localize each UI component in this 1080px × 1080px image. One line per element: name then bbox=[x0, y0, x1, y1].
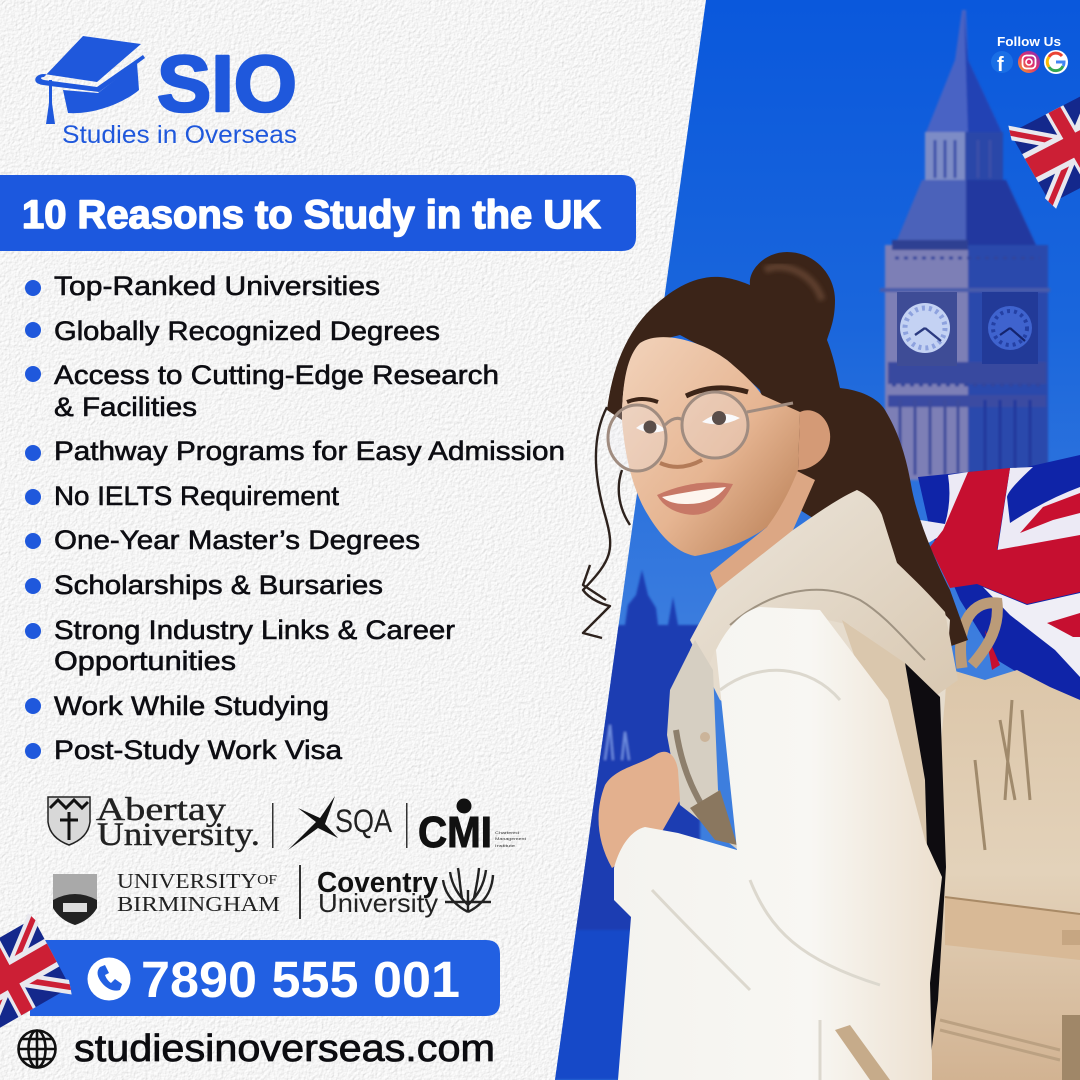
list: 10 reasons bbox=[25, 271, 565, 765]
tagline: Studies in Overseas bbox=[62, 121, 297, 149]
item 8: Opportunities bbox=[54, 646, 236, 676]
item 1: Top-Ranked Universities bbox=[54, 271, 380, 301]
clock right bbox=[982, 292, 1038, 364]
item 7: Scholarships & Bursaries bbox=[54, 570, 383, 600]
icon: google bbox=[1044, 50, 1068, 74]
logo: CMI: Chartered bbox=[495, 830, 519, 835]
item 4: Pathway Programs for Easy Admission bbox=[54, 436, 565, 466]
item 3: Access to Cutting-Edge Research bbox=[54, 360, 499, 390]
phone banner: 7890 555 001 bbox=[141, 951, 460, 1008]
icon: graduation cap bbox=[35, 36, 145, 124]
icon: globe bbox=[18, 1030, 56, 1068]
title banner bbox=[0, 175, 636, 251]
logo: SQA bbox=[288, 796, 393, 850]
eyes bbox=[636, 411, 740, 434]
item 3 bbox=[25, 360, 499, 422]
item 5: No IELTS Requirement bbox=[54, 481, 340, 511]
item 3: & Facilities bbox=[54, 392, 197, 422]
icon: instagram bbox=[1018, 51, 1040, 73]
icon: UK flag corner bbox=[1010, 87, 1080, 204]
glasses bbox=[608, 392, 793, 471]
icon: UK flag badge bbox=[0, 918, 70, 1037]
sky bbox=[550, 0, 1080, 1080]
neck bbox=[710, 470, 815, 590]
divider bbox=[299, 865, 301, 919]
nose bbox=[660, 460, 702, 467]
black inner layer bbox=[905, 663, 946, 1062]
social: follow us bbox=[991, 35, 1068, 76]
hoodie bbox=[690, 490, 958, 715]
logo: University of Birmingham: BIRMINGHAM bbox=[117, 892, 280, 916]
social: follow us: Follow Us bbox=[997, 35, 1061, 49]
divider bbox=[272, 803, 274, 848]
logo: Abertay University: Abertay bbox=[96, 792, 227, 828]
logo: University of Birmingham: OF bbox=[257, 873, 277, 888]
logo: CMI bbox=[418, 798, 527, 857]
hand bbox=[599, 752, 680, 868]
logo: University of Birmingham bbox=[53, 869, 280, 925]
logo: Coventry University: Coventry bbox=[317, 867, 438, 899]
illustration: city skyline bbox=[550, 570, 700, 1080]
title banner: 10 Reasons to Study in the UK bbox=[22, 193, 601, 237]
hood underlay bbox=[690, 490, 950, 860]
website: studiesinoverseas.com bbox=[74, 1028, 495, 1070]
panel: photo background bbox=[550, 0, 1080, 1080]
item 8 bbox=[25, 615, 455, 676]
smile bbox=[657, 482, 733, 515]
wordmark: SIO bbox=[157, 39, 297, 128]
item 6: One-Year Master’s Degrees bbox=[54, 525, 420, 555]
logo: SIO bbox=[35, 36, 297, 149]
logo: CMI: Institute bbox=[495, 843, 516, 848]
icon: facebook: f bbox=[997, 54, 1004, 76]
face bbox=[622, 337, 800, 556]
clock left bbox=[897, 292, 957, 366]
logo: CMI: Management bbox=[495, 836, 527, 841]
logo: CMI: CMI bbox=[418, 808, 492, 857]
hair bun highlight bbox=[765, 267, 822, 300]
item 2: Globally Recognized Degrees bbox=[54, 316, 440, 346]
curly strands bbox=[583, 407, 630, 638]
logo: Coventry University: University bbox=[318, 888, 438, 918]
backpack bbox=[925, 665, 1080, 1080]
illustration: Big Ben tower bbox=[880, 10, 1050, 480]
strap bbox=[667, 640, 738, 850]
item 10: Post-Study Work Visa bbox=[54, 735, 343, 765]
logo: SQA: SQA bbox=[335, 803, 393, 839]
hood seam bbox=[730, 590, 925, 660]
phone banner bbox=[30, 940, 500, 1016]
long hair bbox=[607, 252, 968, 650]
white sleeve bbox=[614, 607, 942, 1080]
illustration: waving UK flag bbox=[918, 455, 1080, 700]
partner logos bbox=[48, 792, 527, 925]
divider bbox=[406, 803, 408, 848]
icon: phone bbox=[88, 958, 130, 1000]
logo: Coventry University bbox=[317, 867, 493, 918]
backpack handle bbox=[961, 603, 997, 668]
logo: Abertay University: University. bbox=[97, 817, 260, 853]
logo: Abertay University bbox=[48, 792, 260, 853]
illustration: student bbox=[583, 252, 1080, 1080]
left eyebrow bbox=[627, 399, 658, 402]
right eyebrow bbox=[686, 388, 748, 396]
item 9: Work While Studying bbox=[54, 691, 329, 721]
tan hoodie panel bbox=[842, 620, 927, 850]
ear bbox=[798, 410, 830, 470]
logo: University of Birmingham: UNIVERSITY bbox=[117, 869, 243, 893]
item 8: Strong Industry Links & Career bbox=[54, 615, 455, 645]
